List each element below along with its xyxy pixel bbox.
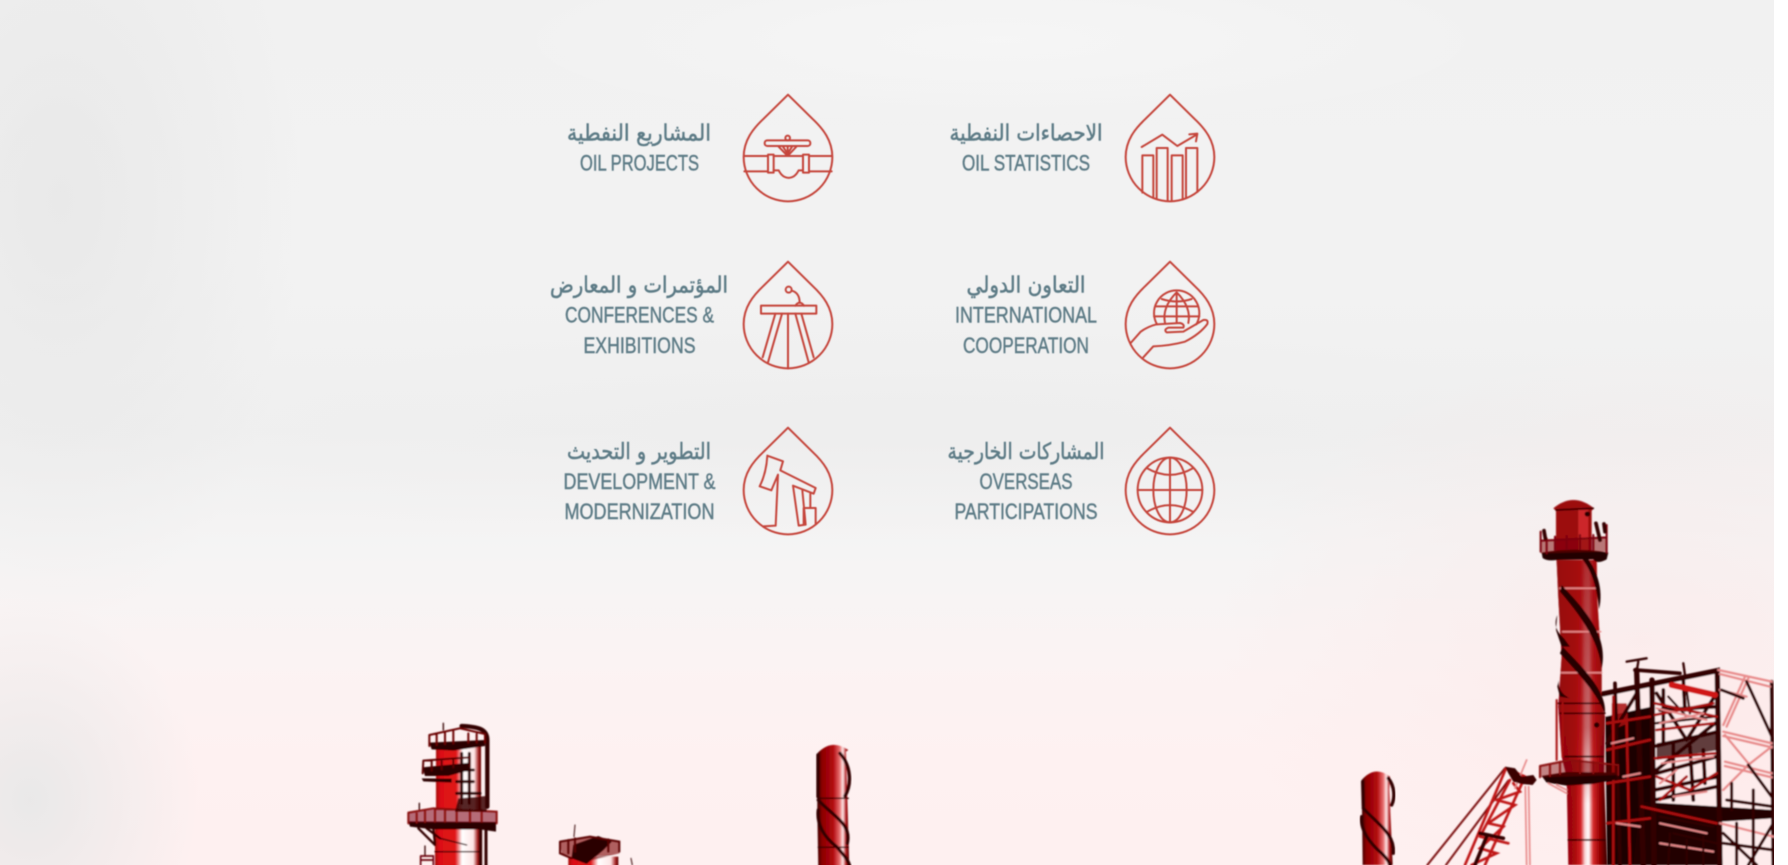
arabic label: المشاركات الخارجية [948, 439, 1104, 465]
arabic label: الاحصاءات النفطية [950, 120, 1102, 146]
english label, line 1: OVERSEAS [980, 469, 1072, 494]
icon: pipeline valve in oil drop [744, 95, 832, 201]
refinery: crane [1427, 760, 1537, 865]
row 1, right: oil statistics [950, 95, 1214, 201]
english label: OIL PROJECTS [580, 150, 699, 176]
english label, line 2: EXHIBITIONS [584, 333, 696, 358]
row 2, left: conferences and exhibitions [550, 262, 832, 368]
english label, line 2: COOPERATION [963, 333, 1089, 358]
row 2, right: international cooperation [955, 262, 1214, 368]
row 3, left: development and modernization [564, 428, 832, 534]
white right margin [1774, 0, 1788, 865]
row 1, left: oil projects [567, 95, 832, 201]
english label, line 2: PARTICIPATIONS [954, 499, 1098, 524]
refinery: steel structure [1603, 658, 1774, 865]
english label: OIL STATISTICS [962, 150, 1090, 176]
english label, line 1: CONFERENCES & [565, 302, 714, 328]
arabic label: المشاريع النفطية [567, 120, 711, 146]
icon: bar chart in oil drop [1126, 95, 1214, 201]
icon: globe in oil drop [1126, 428, 1214, 534]
refinery: short vessel [560, 825, 632, 865]
icon: hand holding globe in oil drop [1126, 262, 1214, 368]
arabic label: المؤتمرات و المعارض [550, 272, 728, 298]
row 3, right: overseas participations [948, 428, 1214, 534]
arabic label: التطوير و التحديث [567, 439, 711, 465]
english label, line 1: DEVELOPMENT & [564, 469, 716, 494]
refinery: left distillation tower [408, 723, 497, 865]
icon: podium with microphone in oil drop [744, 262, 832, 368]
refinery: small spiral stack, centre [817, 745, 850, 865]
english label, line 1: INTERNATIONAL [955, 302, 1097, 328]
arabic label: التعاون الدولي [966, 272, 1086, 298]
icon: pump jack in oil drop [744, 428, 832, 534]
refinery: small spiral stack, right [1361, 772, 1394, 865]
english label, line 2: MODERNIZATION [564, 499, 714, 524]
refinery: tall spiral chimney [1540, 500, 1618, 865]
